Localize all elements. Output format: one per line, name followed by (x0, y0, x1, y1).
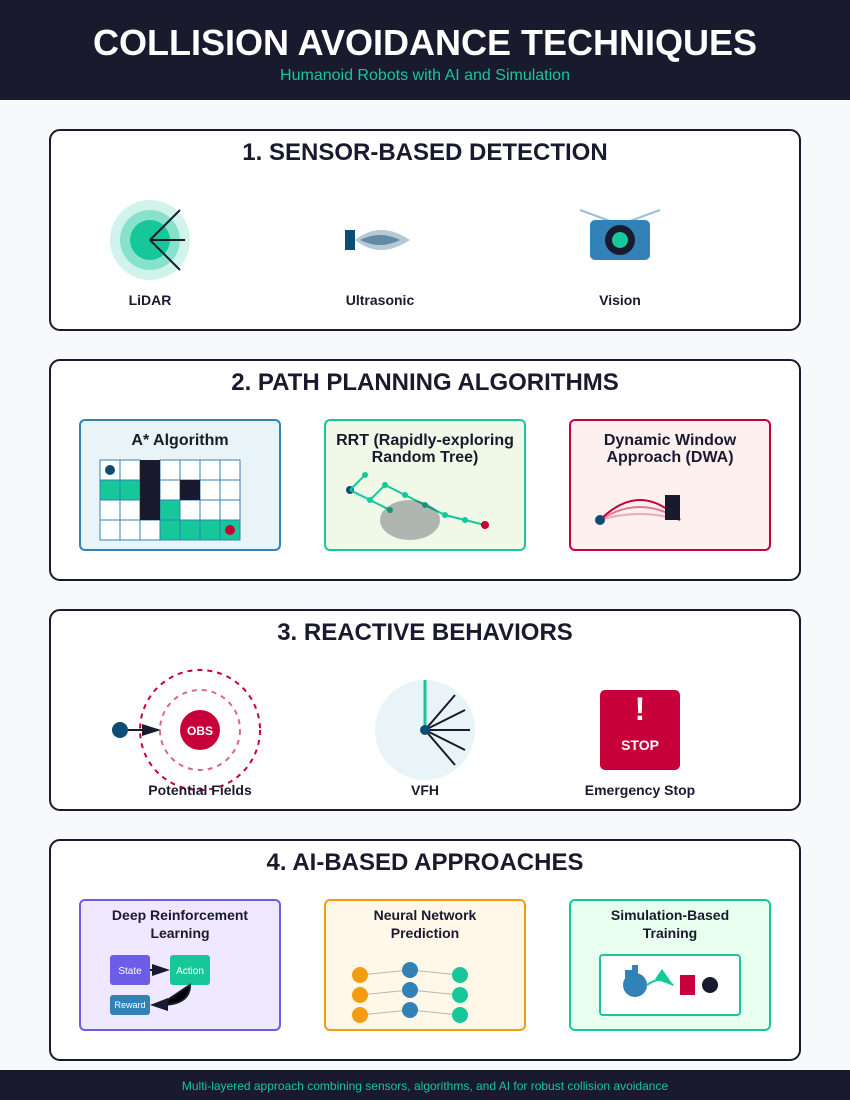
chart: RL loop (110, 955, 210, 1015)
panel: sensor-based detection (50, 130, 800, 330)
card title: DWA: Dynamic Window (604, 432, 736, 449)
panel: path planning algorithms (50, 360, 800, 580)
footer banner (0, 1070, 850, 1100)
chart: RL loop: Reward (114, 1000, 146, 1010)
icon: ultrasonic (345, 230, 410, 250)
icon: vision camera (580, 210, 660, 260)
icon: emergency stop: STOP (621, 737, 659, 753)
chart: RL loop: Action (176, 966, 204, 977)
chart: DWA trajectories (595, 495, 680, 525)
card title: simulation: Training (643, 925, 697, 941)
card title: neural network: Neural Network (374, 907, 476, 923)
card title: RRT: Random Tree) (372, 449, 478, 466)
heading: section 4: 4. AI-BASED APPROACHES (267, 849, 583, 876)
chart: network diagram (352, 962, 468, 1023)
card: A* algorithm (80, 420, 280, 550)
chart: simulation scene (600, 955, 740, 1015)
card: neural network prediction (325, 900, 525, 1030)
subtitle: Humanoid Robots with AI and Simulation (280, 67, 570, 84)
label: potential fields: Potential Fields (148, 782, 252, 798)
heading: section 1: 1. SENSOR-BASED DETECTION (242, 139, 608, 166)
card title: DRL: Learning (150, 925, 210, 941)
label: vision: Vision (599, 292, 641, 308)
card title: A*: A* Algorithm (131, 432, 229, 449)
icon: emergency stop (600, 690, 680, 770)
card title: simulation: Simulation-Based (611, 907, 729, 923)
card: DWA (570, 420, 770, 550)
heading: section 3: 3. REACTIVE BEHAVIORS (277, 619, 573, 646)
card title: DWA: Approach (DWA) (606, 449, 734, 466)
chart: RRT tree (346, 472, 489, 540)
panel: AI-based approaches (50, 840, 800, 1060)
icon: LiDAR (110, 200, 190, 280)
label: VFH: VFH (411, 782, 439, 798)
card: RRT (325, 420, 525, 550)
icon: potential fields: OBS (187, 724, 213, 738)
label: ultrasonic: Ultrasonic (346, 292, 414, 308)
footer banner: Multi-layered approach combining sensors, algorithms, and AI for robust collision avoidance (182, 1079, 668, 1093)
header banner (0, 0, 850, 100)
card title: neural network: Prediction (391, 925, 459, 941)
card title: DRL: Deep Reinforcement (112, 907, 248, 923)
title: COLLISION AVOIDANCE TECHNIQUES (93, 22, 757, 63)
label: emergency stop: Emergency Stop (585, 782, 695, 798)
label: LiDAR: LiDAR (129, 292, 171, 308)
icon: potential fields (112, 670, 260, 790)
chart: A* grid (100, 460, 240, 540)
icon: VFH polar histogram (375, 680, 475, 780)
card: simulation-based training (570, 900, 770, 1030)
card title: RRT: RRT (Rapidly-exploring (336, 432, 514, 449)
chart: RL loop: State (118, 966, 142, 977)
icon: emergency stop: ! (635, 691, 645, 727)
card: deep reinforcement learning (80, 900, 280, 1030)
panel: reactive behaviors (50, 610, 800, 810)
heading: section 2: 2. PATH PLANNING ALGORITHMS (231, 369, 619, 396)
